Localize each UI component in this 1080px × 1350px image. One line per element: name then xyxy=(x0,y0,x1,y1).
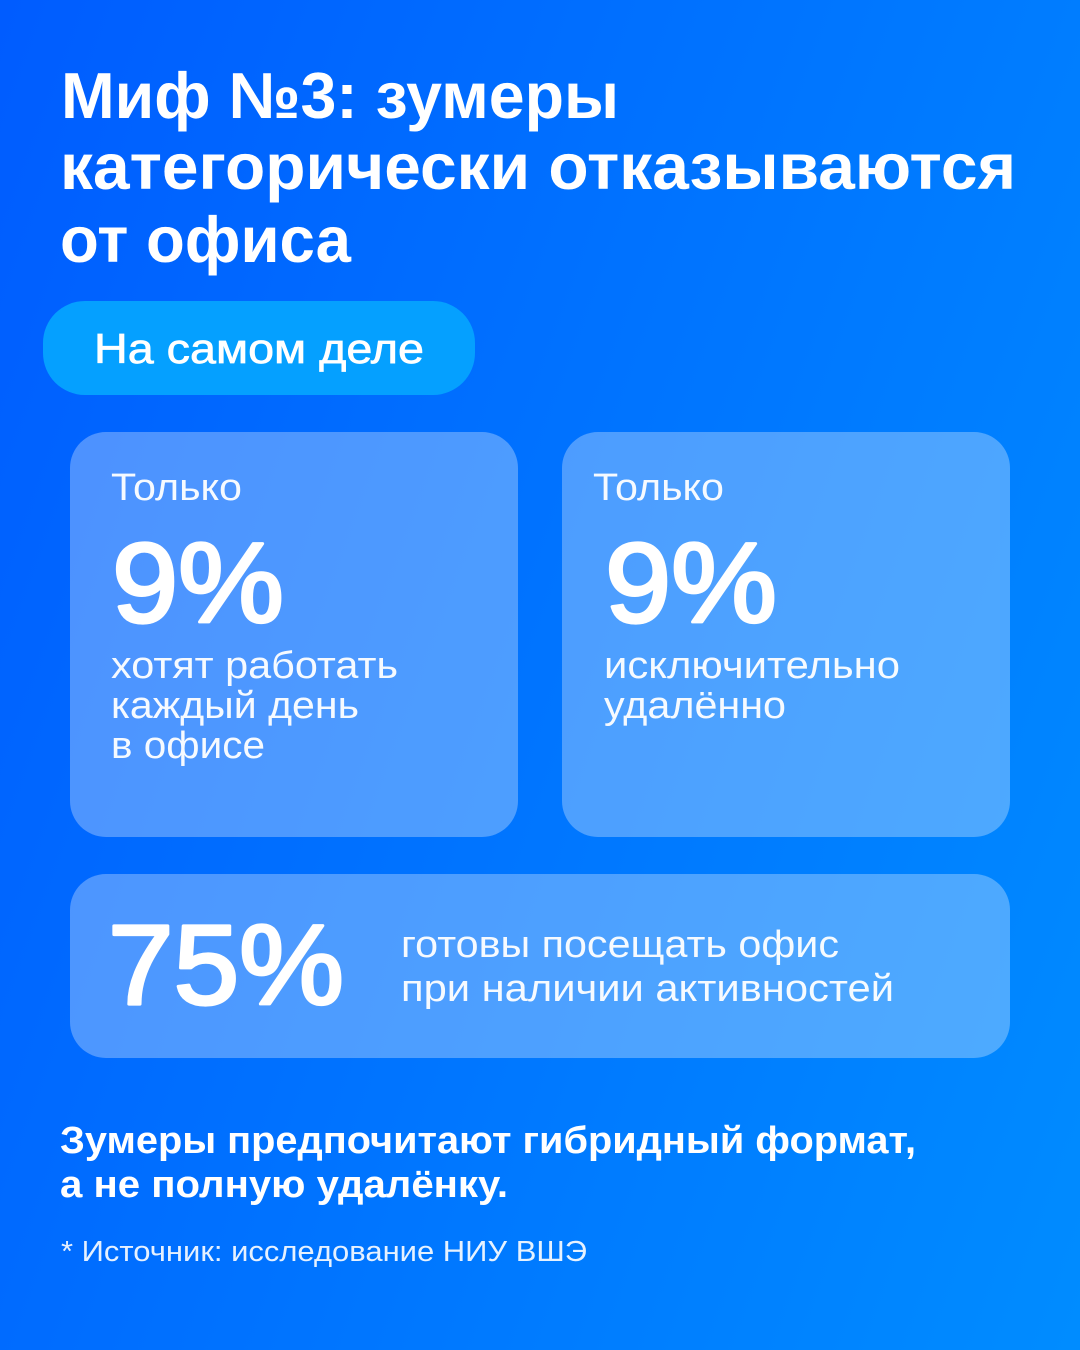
panel: 9% every day in office: 9% xyxy=(112,520,284,646)
conclusion text xyxy=(60,1120,916,1206)
badge: на самом деле: На самом деле xyxy=(94,325,424,372)
panel: 75% ready to visit office: готовы посещать офис xyxy=(401,924,839,966)
panel: 75% ready to visit office: при наличии активностей xyxy=(401,968,894,1010)
title: категорически отказываются xyxy=(60,130,1016,203)
panel: 75% ready to visit office: 75% xyxy=(108,902,344,1028)
panel: 75% ready to visit office xyxy=(70,874,1010,1058)
title: Миф №3: зумеры xyxy=(61,59,619,132)
panel: 9% every day in office xyxy=(70,432,518,837)
badge: на самом деле xyxy=(43,301,475,395)
title: от офиса xyxy=(60,203,352,276)
panel: 9% exclusively remote: 9% xyxy=(605,520,777,646)
panel: 9% exclusively remote xyxy=(562,432,1010,837)
panel: 9% exclusively remote: исключительно xyxy=(604,645,900,687)
source note: * Источник: исследование НИУ ВШЭ xyxy=(61,1236,587,1268)
panel: 9% every day in office: каждый день xyxy=(111,685,359,727)
panel: 9% every day in office: хотят работать xyxy=(111,645,398,687)
panel: 9% exclusively remote: Только xyxy=(593,467,724,509)
conclusion text: а не полную удалёнку. xyxy=(60,1164,508,1206)
title xyxy=(60,59,1016,276)
conclusion text: Зумеры предпочитают гибридный формат, xyxy=(60,1120,916,1162)
panel: 9% exclusively remote: удалённо xyxy=(604,685,786,727)
panel: 9% every day in office: в офисе xyxy=(111,725,265,767)
panel: 9% every day in office: Только xyxy=(111,467,242,509)
